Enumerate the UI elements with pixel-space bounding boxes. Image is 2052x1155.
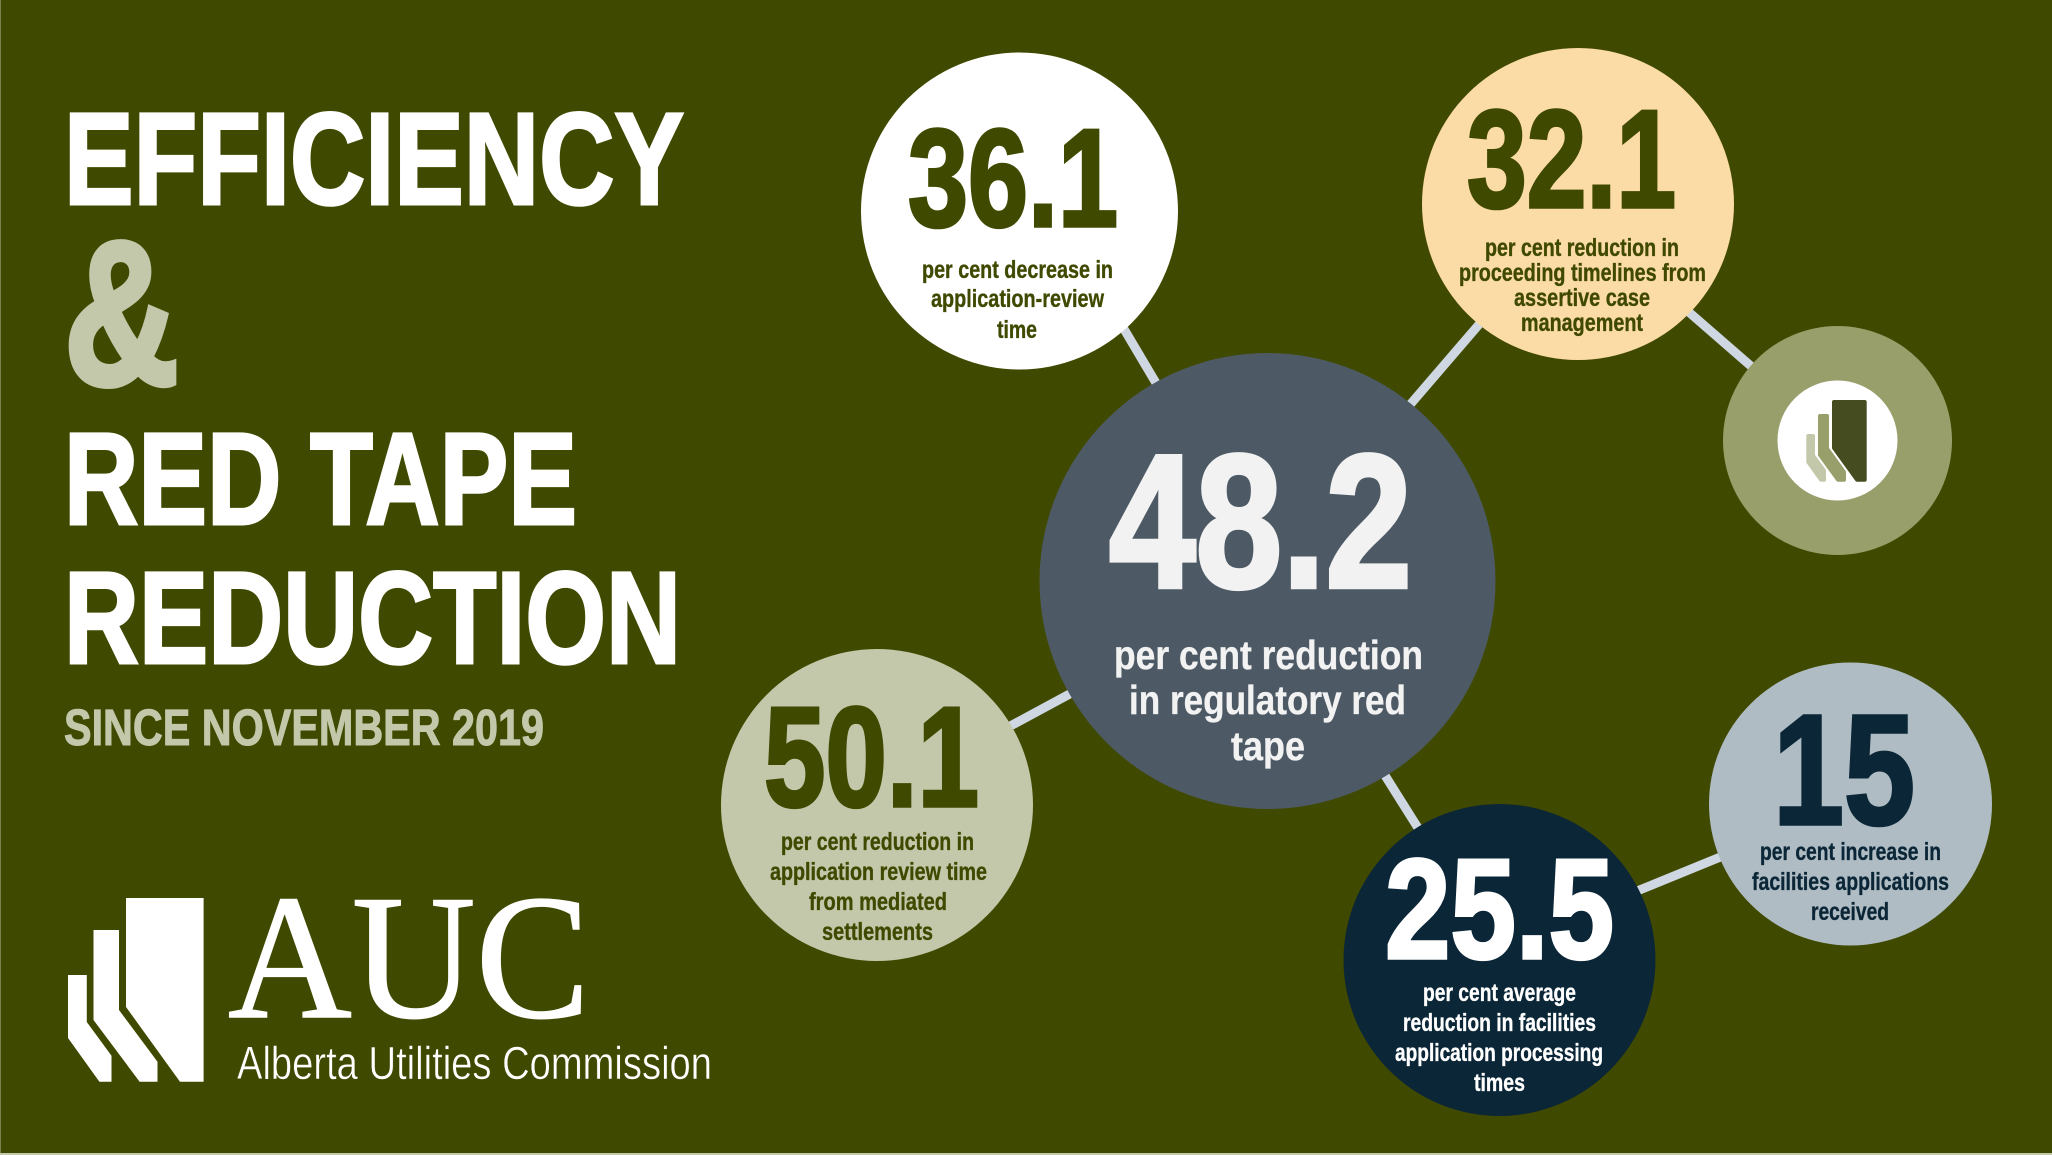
number: 15: 15	[1773, 683, 1915, 858]
caption: 32.1: management	[1521, 309, 1644, 337]
caption: 32.1: proceeding timelines from	[1459, 259, 1706, 287]
number: 25.5: 25.5	[1385, 830, 1614, 989]
heading: reduction: REDUCTION	[64, 544, 681, 691]
heading: efficiency: EFFICIENCY	[64, 85, 684, 232]
subtitle: since november 2019: SINCE NOVEMBER 2019	[64, 699, 544, 756]
caption: 36.1	[922, 256, 1113, 344]
circle: 50.1 mediated settlements	[721, 649, 1033, 961]
logo name: Alberta Utilities Commission: Alberta Utilities Commission	[237, 1037, 712, 1089]
caption: 25.5: application processing	[1395, 1039, 1603, 1067]
caption: 48.2: per cent reduction	[1114, 632, 1423, 678]
logo mark: Alberta shape	[68, 898, 204, 1082]
caption: 48.2: in regulatory red	[1129, 677, 1406, 723]
number: 50.1: 50.1	[764, 678, 979, 837]
caption: 25.5: per cent average	[1423, 979, 1576, 1007]
caption: 50.1: application review time	[770, 858, 987, 886]
caption: 36.1: application-review	[931, 285, 1104, 313]
circle: AUC icon badge	[1723, 326, 1952, 555]
caption: 15	[1752, 838, 1949, 926]
circle: 32.1 proceeding timelines	[1422, 48, 1734, 360]
circle: 48.2 central statistic	[1040, 353, 1496, 809]
caption: 15: received	[1811, 898, 1889, 926]
caption: 15: per cent increase in	[1760, 838, 1941, 866]
circle: 15 facilities applications	[1709, 662, 1992, 946]
number: 36.1: 36.1	[908, 101, 1118, 256]
caption: 15: facilities applications	[1752, 868, 1949, 896]
circle: 25.5 facilities processing times	[1344, 804, 1656, 1116]
number: 48.2: 48.2	[1109, 416, 1412, 628]
caption: 36.1: time	[997, 316, 1037, 344]
logo wordmark: AUC: AUC	[228, 858, 590, 1056]
caption: 48.2: tape	[1231, 723, 1305, 769]
caption: 25.5: reduction in facilities	[1403, 1009, 1596, 1037]
caption: 32.1: per cent reduction in	[1485, 234, 1679, 262]
icon: Alberta shape	[1808, 402, 1865, 480]
caption: 32.1: assertive case	[1514, 284, 1650, 312]
title block	[64, 85, 684, 756]
circle: 36.1 application-review time	[861, 52, 1178, 370]
caption: 50.1: settlements	[822, 918, 933, 946]
caption: 36.1: per cent decrease in	[922, 256, 1113, 284]
connector lines	[990, 287, 1775, 898]
number: 32.1: 32.1	[1467, 82, 1676, 237]
caption: 25.5: times	[1474, 1069, 1525, 1097]
ampersand: &	[64, 199, 179, 428]
AUC logo	[68, 858, 712, 1089]
caption: 50.1: per cent reduction in	[781, 828, 974, 856]
heading: red tape: RED TAPE	[64, 405, 577, 552]
caption: 25.5	[1395, 979, 1603, 1097]
caption: 50.1	[770, 828, 987, 946]
caption: 50.1: from mediated	[809, 888, 947, 916]
caption: 32.1	[1459, 234, 1706, 337]
caption: 48.2	[1114, 632, 1423, 769]
